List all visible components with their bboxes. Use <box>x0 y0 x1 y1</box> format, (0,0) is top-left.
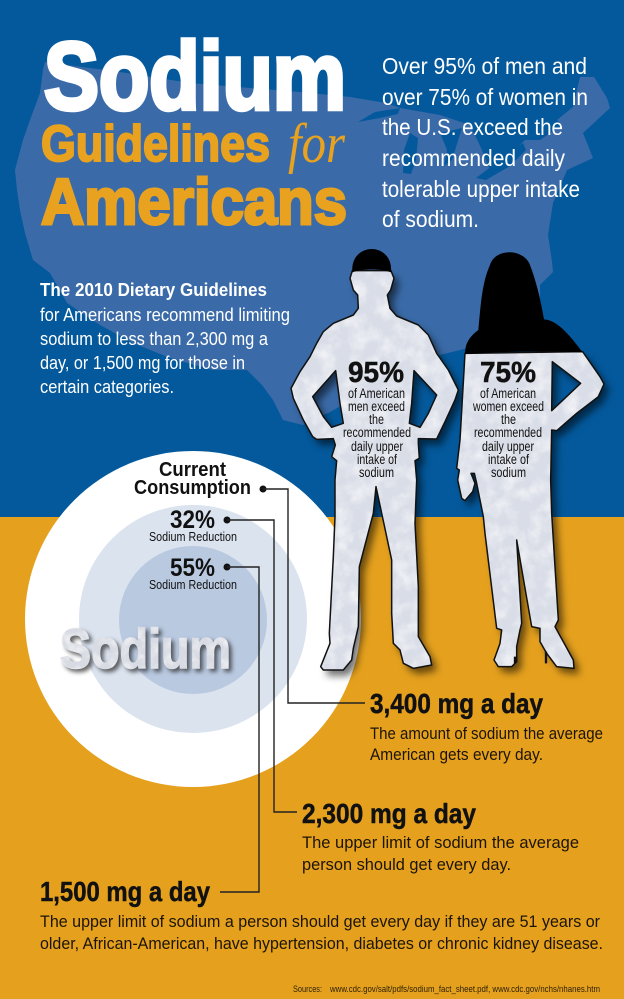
woman statistic: 75%: daily upper <box>482 439 534 454</box>
leader line: current consumption to 3,400 mg <box>260 486 365 703</box>
callout: 2,300 mg a day: person should get every day. <box>302 855 511 874</box>
man statistic: 95%: sodium <box>359 465 394 480</box>
middle circle: 32% reduction <box>79 505 307 733</box>
label: 32% sodium reduction: 32% <box>170 506 215 534</box>
title <box>41 23 347 238</box>
callout: 1,500 mg a day: The upper limit of sodium a person should get every day if they are 51 years or <box>40 912 600 931</box>
label: 32% sodium reduction: Sodium Reduction <box>149 529 237 544</box>
woman statistic: 75%: the <box>501 412 516 427</box>
dietary guidelines text block: for Americans recommend limiting <box>40 305 290 325</box>
background: blue upper band <box>0 0 624 517</box>
inner circle: 55% reduction <box>119 546 267 694</box>
concentric sodium circles <box>25 451 361 787</box>
map of the United States <box>15 62 610 425</box>
callout: 1,500 mg a day: 1,500 mg a day <box>40 876 210 907</box>
woman statistic: 75%: recommended <box>474 425 542 440</box>
label: 32% sodium reduction <box>149 506 237 544</box>
lake michigan <box>403 133 418 174</box>
label: current consumption <box>134 459 251 499</box>
intro statistic text block: Over 95% of men and <box>382 53 587 79</box>
dietary guidelines text block: certain categories. <box>40 377 174 397</box>
title word: Guidelines: Guidelines <box>41 115 270 172</box>
man statistic: 95%: recommended <box>343 425 411 440</box>
intro statistic text block: over 75% of women in <box>382 84 588 110</box>
dietary guidelines text block <box>40 280 290 397</box>
title word: Sodium: Sodium <box>44 23 346 130</box>
man: black cap <box>352 249 391 272</box>
woman statistic: 75%: of American <box>480 386 536 401</box>
lake erie <box>476 143 526 180</box>
intro statistic text block: recommended daily <box>382 145 565 171</box>
woman statistic: 75%: sodium <box>491 465 526 480</box>
background: gold lower band <box>0 517 624 999</box>
man statistic: 95%: 95% <box>348 357 404 389</box>
callout: 1,500 mg a day: older, African-American, have hypertension, diabetes or chronic kidney disease. <box>40 934 603 953</box>
man statistic: 95% <box>343 357 411 480</box>
callout: 3,400 mg a day: 3,400 mg a day <box>370 688 543 719</box>
callout: 2,300 mg a day: The upper limit of sodium the average <box>302 833 579 852</box>
woman statistic: 75%: intake of <box>488 452 529 467</box>
dietary guidelines text block: sodium to less than 2,300 mg a <box>40 329 269 349</box>
label: 55% sodium reduction <box>149 554 237 592</box>
woman statistic: 75%: 75% <box>480 357 536 389</box>
man statistic: 95%: of American <box>348 386 405 401</box>
callout: 2,300 mg a day: 2,300 mg a day <box>302 798 476 829</box>
title word: Americans: Americans <box>41 165 347 238</box>
intro statistic text block: of sodium. <box>382 206 479 232</box>
intro statistic text block: the U.S. exceed the <box>382 114 563 140</box>
silhouette: woman <box>457 252 604 668</box>
outer circle: current consumption <box>25 451 361 787</box>
woman statistic: 75% <box>472 357 544 480</box>
leader line: 55% to 1,500 mg <box>220 564 259 892</box>
callout: 1,500 mg a day <box>40 876 603 953</box>
woman: shoe heels <box>515 652 546 663</box>
dietary guidelines text block: The 2010 Dietary Guidelines <box>40 280 267 300</box>
embossed word: Sodium: Sodium <box>60 617 231 680</box>
lake superior <box>358 108 400 122</box>
callout: 3,400 mg a day: American gets every day. <box>370 745 543 764</box>
intro statistic text block: tolerable upper intake <box>382 176 580 202</box>
woman: black hair and shoulders <box>465 252 583 354</box>
label: current consumption: Consumption <box>134 477 251 499</box>
intro statistic text block <box>382 53 588 232</box>
dietary guidelines text block: day, or 1,500 mg for those in <box>40 353 245 373</box>
man statistic: 95%: the <box>369 412 384 427</box>
lake huron <box>440 128 462 166</box>
sources: Sources: <box>293 984 322 994</box>
callout: 3,400 mg a day <box>370 688 603 764</box>
man statistic: 95%: intake of <box>357 452 397 467</box>
label: 55% sodium reduction: Sodium Reduction <box>149 577 237 592</box>
leader line: 32% to 2,300 mg <box>224 516 297 812</box>
label: current consumption: Current <box>159 459 226 481</box>
label: 55% sodium reduction: 55% <box>170 554 215 582</box>
man statistic: 95%: men exceed <box>348 399 405 414</box>
lake ontario <box>525 120 562 140</box>
man statistic: 95%: daily upper <box>351 439 403 454</box>
silhouette: man <box>291 249 458 670</box>
callout: 2,300 mg a day <box>302 798 579 874</box>
woman statistic: 75%: women exceed <box>472 399 544 414</box>
title word: for: for <box>288 113 345 175</box>
